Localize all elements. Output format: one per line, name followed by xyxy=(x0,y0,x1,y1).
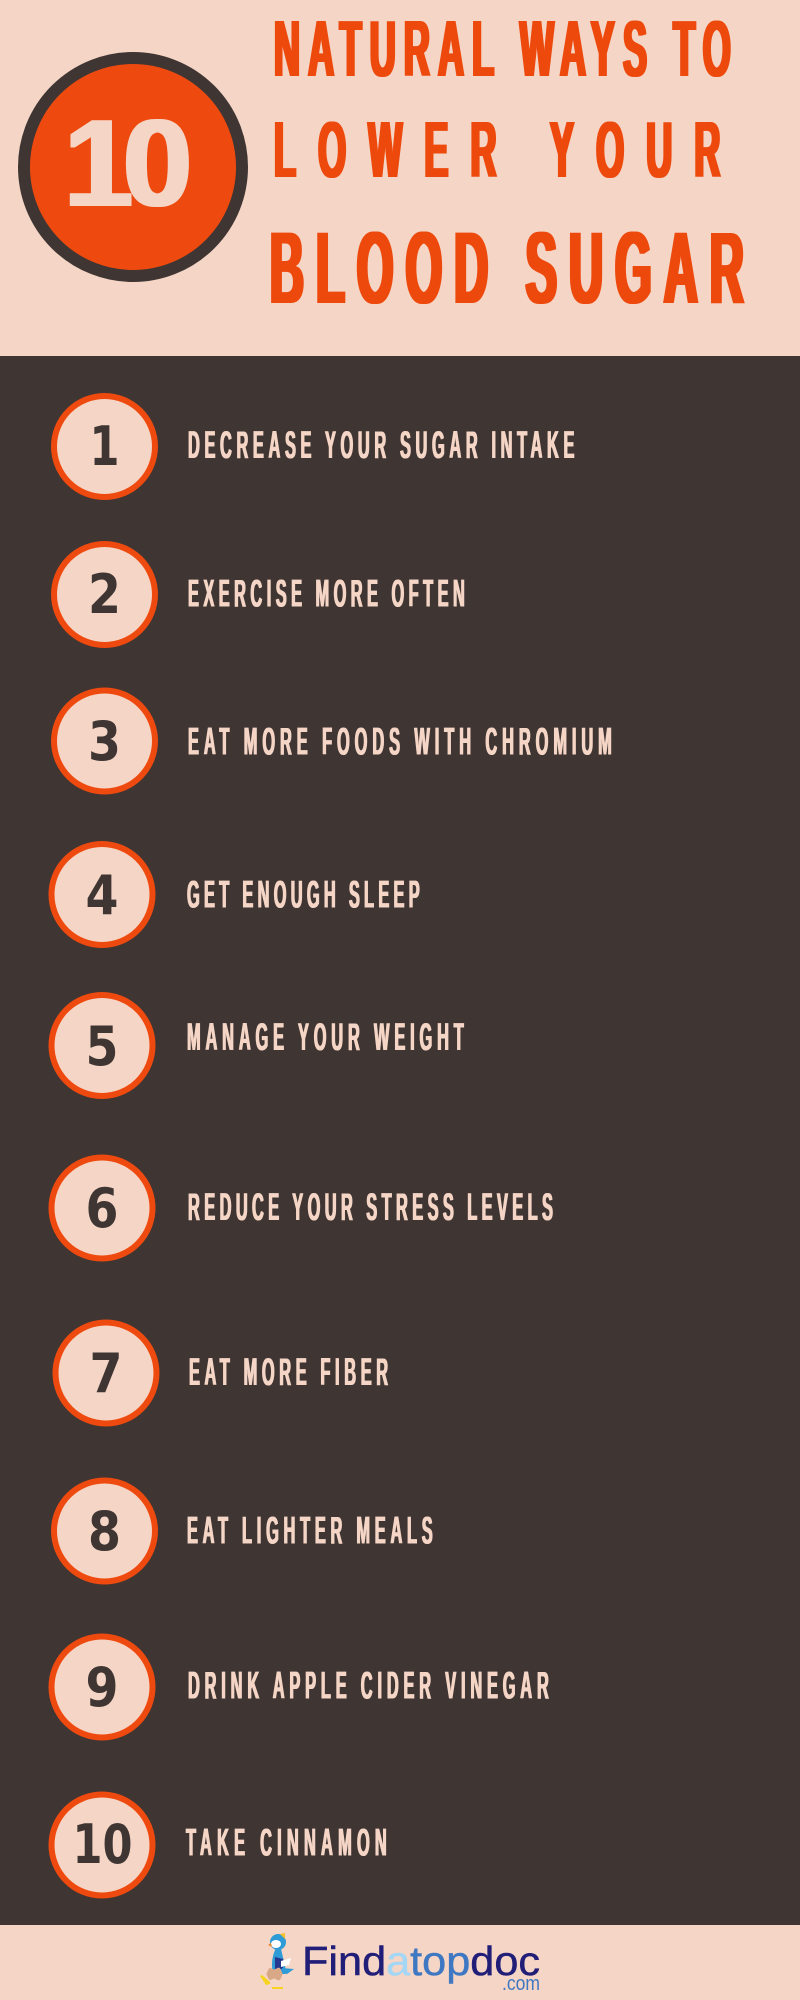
item 3: EAT MORE FOODS WITH CHROMIUM xyxy=(188,721,612,764)
item 4: 4 xyxy=(86,864,118,927)
item 9: 9 xyxy=(86,1656,118,1719)
title xyxy=(270,5,744,325)
list panel xyxy=(0,356,800,1925)
item 2: EXERCISE MORE OFTEN xyxy=(188,573,465,616)
item 9: DRINK APPLE CIDER VINEGAR xyxy=(188,1665,549,1708)
item 10: 10 xyxy=(72,1813,132,1876)
icon: bird mascot xyxy=(260,1933,294,1989)
logo wordmark: .com xyxy=(502,1973,540,1995)
item 8 xyxy=(54,1480,433,1582)
item 8: 8 xyxy=(88,1500,121,1563)
item 6: 6 xyxy=(86,1177,118,1240)
item 10 xyxy=(52,1794,387,1896)
title: NATURAL WAYS TO xyxy=(274,5,731,94)
item 7: 7 xyxy=(90,1342,122,1405)
item 7: EAT MORE FIBER xyxy=(189,1351,388,1394)
item 5: 5 xyxy=(86,1015,118,1078)
item 9 xyxy=(52,1636,549,1738)
item 8: EAT LIGHTER MEALS xyxy=(187,1510,433,1553)
item 7 xyxy=(56,1322,388,1424)
item 5: MANAGE YOUR WEIGHT xyxy=(187,1016,464,1059)
logo wordmark: Findatopdoc xyxy=(302,1938,540,1984)
item 1: DECREASE YOUR SUGAR INTAKE xyxy=(188,424,574,467)
item 10: TAKE CINNAMON xyxy=(186,1822,387,1865)
item 3: 3 xyxy=(88,710,121,773)
item 1: 1 xyxy=(90,415,120,478)
item 2 xyxy=(54,544,465,645)
badge: 10: 10 xyxy=(64,95,192,233)
title: LOWER YOUR xyxy=(274,106,720,195)
header panel xyxy=(0,0,800,356)
badge: 10 xyxy=(24,58,242,276)
item 2: 2 xyxy=(88,563,121,626)
item 6: REDUCE YOUR STRESS LEVELS xyxy=(188,1186,553,1229)
item 5 xyxy=(52,995,464,1096)
item 3 xyxy=(54,690,612,792)
title: BLOOD SUGAR xyxy=(270,210,744,325)
item 4: GET ENOUGH SLEEP xyxy=(187,874,420,917)
item 4 xyxy=(52,844,420,945)
footer panel xyxy=(0,1925,800,2000)
item 6 xyxy=(52,1158,553,1258)
item 1 xyxy=(54,396,574,497)
